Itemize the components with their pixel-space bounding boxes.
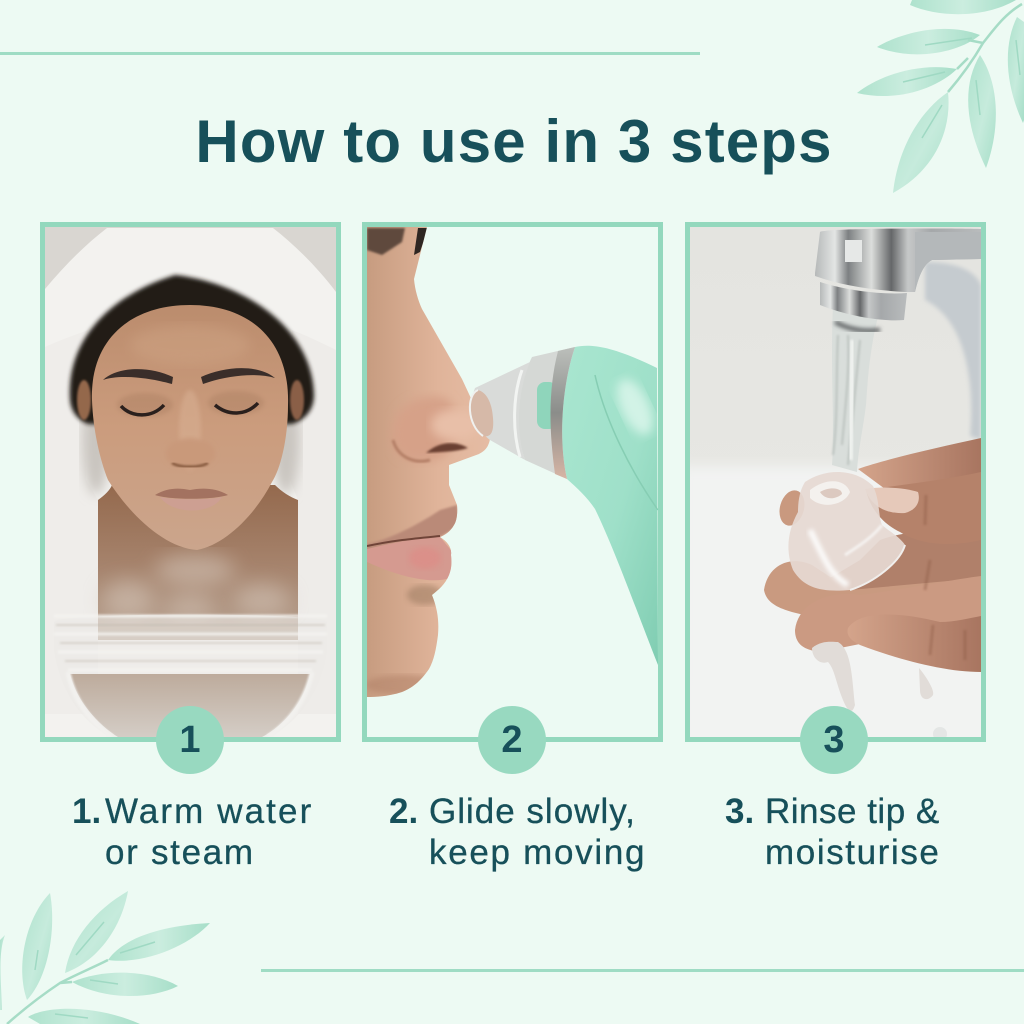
glass bowl xyxy=(54,614,327,737)
clear silicone tip xyxy=(788,472,905,591)
caption: step 1 xyxy=(72,792,313,872)
lip line xyxy=(367,536,440,546)
fingertip behind the tip xyxy=(776,488,808,528)
front finger xyxy=(848,614,981,672)
thumb nail xyxy=(865,488,919,513)
ears xyxy=(77,380,91,420)
hands xyxy=(764,438,981,672)
neck and chest xyxy=(98,485,298,640)
lower lip xyxy=(367,537,455,580)
face xyxy=(92,305,288,550)
bottom divider line xyxy=(261,969,1024,972)
clear nozzle base xyxy=(519,347,575,479)
faucet xyxy=(815,228,981,320)
device body xyxy=(562,346,658,665)
eyelashes xyxy=(121,405,164,415)
nose xyxy=(166,438,215,468)
mint disc xyxy=(537,382,557,429)
panel: step 3 photo, rinse tip xyxy=(685,222,986,742)
caption: step 2: Glide slowly, xyxy=(429,792,636,831)
faucet pipe xyxy=(925,262,981,440)
caption: step 1: 1. xyxy=(72,792,101,831)
badge: number 1 xyxy=(156,706,224,774)
caption: step 3: Rinse tip & xyxy=(765,792,940,831)
lips xyxy=(155,489,228,499)
badge: number 1: 1 xyxy=(179,719,201,761)
caption: step 2 xyxy=(389,792,646,872)
top divider line xyxy=(0,52,700,55)
palm finger xyxy=(810,532,981,590)
caption: step 1: or steam xyxy=(105,833,255,872)
upper lip xyxy=(367,505,460,550)
caption: step 3: 3. xyxy=(725,792,754,831)
icon: leaves top right xyxy=(857,0,1024,193)
hair xyxy=(70,275,314,424)
upper finger xyxy=(858,438,981,500)
nozzle tip on the nose xyxy=(470,390,493,436)
chrome ring xyxy=(550,347,575,479)
sink basin xyxy=(680,466,1000,756)
nostril xyxy=(426,443,468,453)
steam xyxy=(102,554,290,620)
caption: step 3: moisturise xyxy=(765,833,940,872)
eyebrows xyxy=(103,369,173,384)
badge: number 3 xyxy=(800,706,868,774)
towel xyxy=(45,228,336,737)
water drips xyxy=(812,642,947,741)
eyebrow and hair xyxy=(367,228,405,255)
badge: number 2 xyxy=(478,706,546,774)
icon: leaves bottom left xyxy=(0,891,210,1024)
caption: step 1: Warm water xyxy=(105,792,313,831)
stem xyxy=(7,960,108,1024)
face profile xyxy=(365,227,497,702)
title: How to use in 3 steps xyxy=(195,108,833,175)
caption: step 2: 2. xyxy=(389,792,418,831)
badge: number 2: 2 xyxy=(501,719,523,761)
panel: step 1 photo, warm water or steam xyxy=(40,222,341,742)
stem xyxy=(948,4,1022,92)
badge: number 3: 3 xyxy=(823,719,845,761)
device xyxy=(470,346,660,665)
caption: step 3 xyxy=(725,792,940,872)
caption: step 2: keep moving xyxy=(429,833,646,872)
water stream xyxy=(832,305,881,472)
thumb xyxy=(866,472,981,544)
clear nozzle cone xyxy=(473,362,530,460)
panel: step 2 photo, glide slowly xyxy=(362,222,663,742)
nose wing xyxy=(406,396,453,460)
middle finger xyxy=(764,561,981,623)
